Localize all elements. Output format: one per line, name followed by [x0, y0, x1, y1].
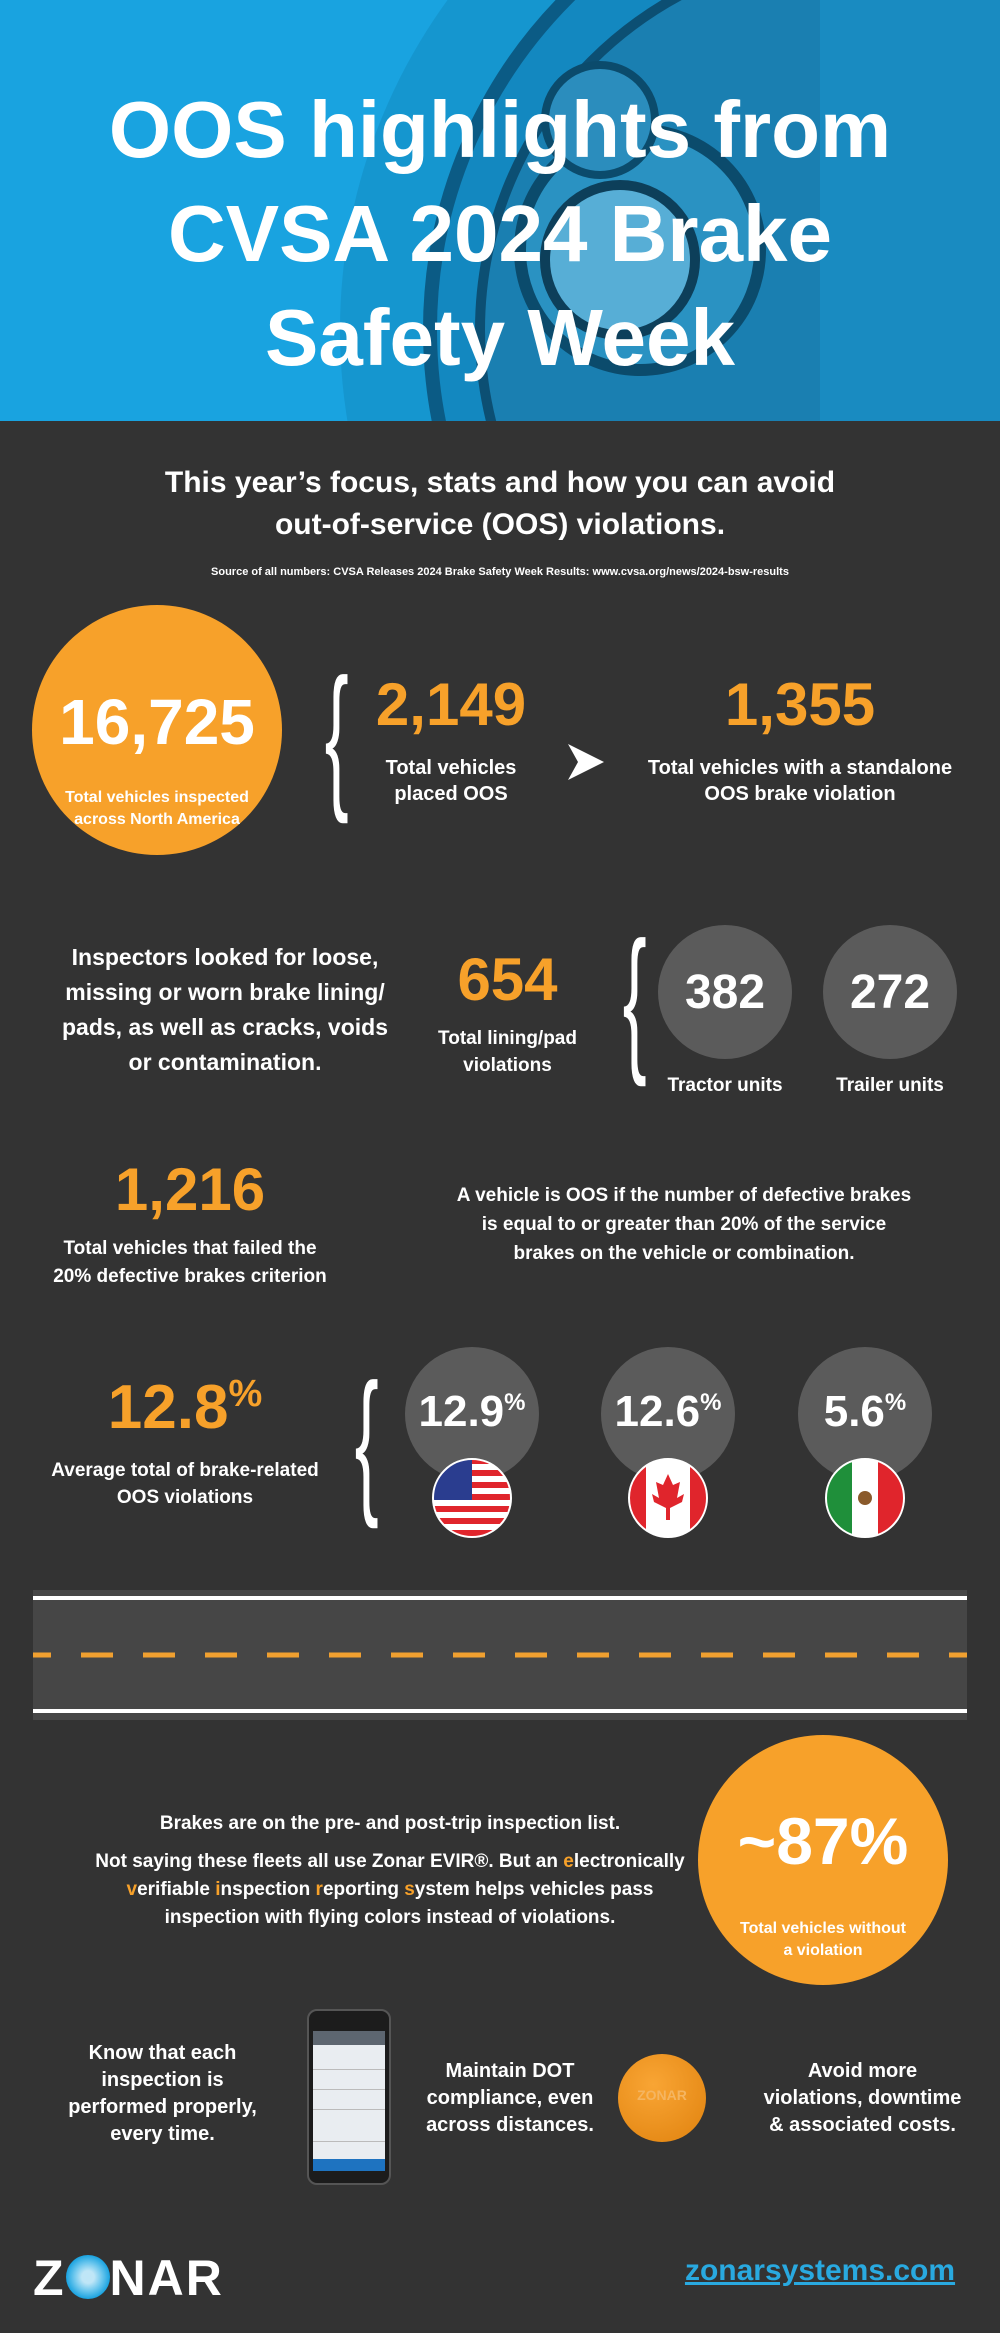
circle: 382 tractor: Tractor units	[667, 1075, 783, 1096]
text: OOS definition: A vehicle is OOS if the number of defective brakes	[457, 1185, 911, 1206]
stat: 1,355: OOS brake violation	[704, 783, 896, 805]
stat: 12.8%: Average total of brake-related	[51, 1460, 319, 1481]
benefit: each inspection: inspection is	[101, 2069, 224, 2091]
brace 3: {	[355, 1350, 379, 1529]
benefit: each inspection	[68, 2042, 257, 2145]
subtitle: This year’s focus, stats and how you can avoid	[165, 466, 835, 499]
benefit: avoid violations: violations, downtime	[764, 2087, 961, 2109]
icon: zonar coin: ZONAR	[637, 2087, 687, 2103]
text: EVIR pitch: verifiable inspection reporting system helps vehicles pass	[126, 1879, 653, 1900]
title: OOS highlights from	[109, 85, 891, 174]
text: EVIR pitch: inspection with flying colors instead of violations.	[165, 1907, 615, 1928]
text: inspectors looked for: or contamination.	[129, 1049, 321, 1075]
stat: 2,149: placed OOS	[394, 783, 508, 805]
stat: 2,149: Total vehicles	[386, 757, 516, 779]
stat: 2,149	[376, 671, 526, 805]
circle: 272 trailer: 272	[850, 966, 930, 1019]
stat: 654	[438, 946, 577, 1076]
logo: zonar: Z NAR	[33, 2250, 224, 2306]
circle: 382 tractor	[658, 925, 792, 1096]
arrow	[568, 744, 604, 780]
benefit: avoid violations: Avoid more	[808, 2060, 917, 2082]
subtitle: out-of-service (OOS) violations.	[275, 508, 725, 541]
country: USA 12.9%	[405, 1347, 539, 1538]
country: USA 12.9%: 12.9%	[418, 1387, 525, 1436]
text: inspectors looked for: pads, as well as cracks, voids	[62, 1014, 388, 1040]
flag: USA	[432, 1458, 512, 1538]
stat: 16,725 circle: across North America	[74, 811, 240, 828]
stat: ~87% circle: ~87%	[738, 1804, 908, 1878]
stat: 1,216: 1,216	[115, 1156, 265, 1223]
text: EVIR pitch: Brakes are on the pre- and post-trip inspection list. Not saying these fleets all use Zonar EVIR®. But an electronically	[95, 1813, 685, 1872]
title	[109, 85, 891, 382]
brake disc image	[340, 0, 1000, 421]
benefit: each inspection: every time.	[110, 2123, 215, 2145]
icon: zonar coin	[618, 2054, 706, 2142]
stat: 12.8%: 12.8%	[108, 1373, 262, 1442]
source line: Source of all numbers: CVSA Releases 2024 Brake Safety Week Results: www.cvsa.org/news/2024-bsw-results	[211, 566, 789, 578]
stat: 1,355: Total vehicles with a standalone	[648, 757, 952, 779]
benefit: DOT compliance: compliance, even	[427, 2087, 593, 2109]
stat: 654: violations	[463, 1055, 552, 1076]
text: inspectors looked for: Inspectors looked for loose,	[72, 944, 378, 970]
stat: 1,355: 1,355	[725, 671, 875, 738]
text: inspectors looked for	[62, 944, 388, 1075]
title: Safety Week	[265, 293, 735, 382]
country: Mexico 5.6%	[798, 1347, 932, 1538]
benefit: DOT compliance: Maintain DOT	[446, 2060, 574, 2082]
country: Canada 12.6%: 12.6%	[614, 1387, 721, 1436]
stat: 12.8%: OOS violations	[117, 1487, 253, 1508]
benefit: avoid violations: & associated costs.	[769, 2114, 956, 2136]
flag: Canada	[628, 1458, 708, 1538]
title: CVSA 2024 Brake	[168, 189, 832, 278]
circle: 382 tractor: 382	[685, 966, 765, 1019]
benefit: DOT compliance: across distances.	[426, 2114, 594, 2136]
stat: 1,216	[53, 1156, 327, 1287]
subtitle	[165, 466, 835, 541]
stat: 16,725 circle	[32, 605, 282, 855]
stat: 12.8%	[51, 1373, 319, 1508]
text: OOS definition	[457, 1185, 911, 1264]
road divider	[33, 1590, 967, 1720]
country: Mexico 5.6%: 5.6%	[824, 1387, 906, 1436]
stat: 1,216: Total vehicles that failed the	[63, 1238, 317, 1259]
stat: ~87% circle: a violation	[783, 1942, 863, 1959]
benefit: DOT compliance	[426, 2060, 594, 2136]
text: EVIR pitch	[95, 1813, 685, 1928]
stat: 1,355	[648, 671, 952, 805]
brace 2: {	[623, 908, 647, 1087]
flag: Mexico	[825, 1458, 905, 1538]
country: Canada 12.6%	[601, 1347, 735, 1538]
stat: ~87% circle	[698, 1735, 948, 1985]
stat: 2,149: 2,149	[376, 671, 526, 738]
header banner	[0, 0, 1000, 421]
circle: 272 trailer	[823, 925, 957, 1096]
text: inspectors looked for: missing or worn brake lining/	[65, 979, 385, 1005]
circle: 272 trailer: Trailer units	[836, 1075, 944, 1096]
stat: 654: 654	[457, 946, 558, 1013]
stat: 16,725 circle: 16,725	[59, 686, 255, 758]
stat: 654: Total lining/pad	[438, 1028, 577, 1049]
icon: phone	[307, 2009, 391, 2185]
stat: ~87% circle: Total vehicles without	[740, 1920, 906, 1937]
benefit: each inspection: Know that each	[89, 2042, 236, 2064]
text: OOS definition: brakes on the vehicle or combination.	[513, 1243, 855, 1264]
benefit: each inspection: performed properly,	[68, 2096, 257, 2118]
text: OOS definition: is equal to or greater than 20% of the service	[482, 1214, 886, 1235]
benefit: avoid violations	[764, 2060, 961, 2136]
brace 1: {	[325, 645, 349, 824]
stat: 16,725 circle: Total vehicles inspected	[65, 789, 249, 806]
stat: 1,216: 20% defective brakes criterion	[53, 1266, 327, 1287]
footer url: zonarsystems.com	[685, 2254, 955, 2287]
